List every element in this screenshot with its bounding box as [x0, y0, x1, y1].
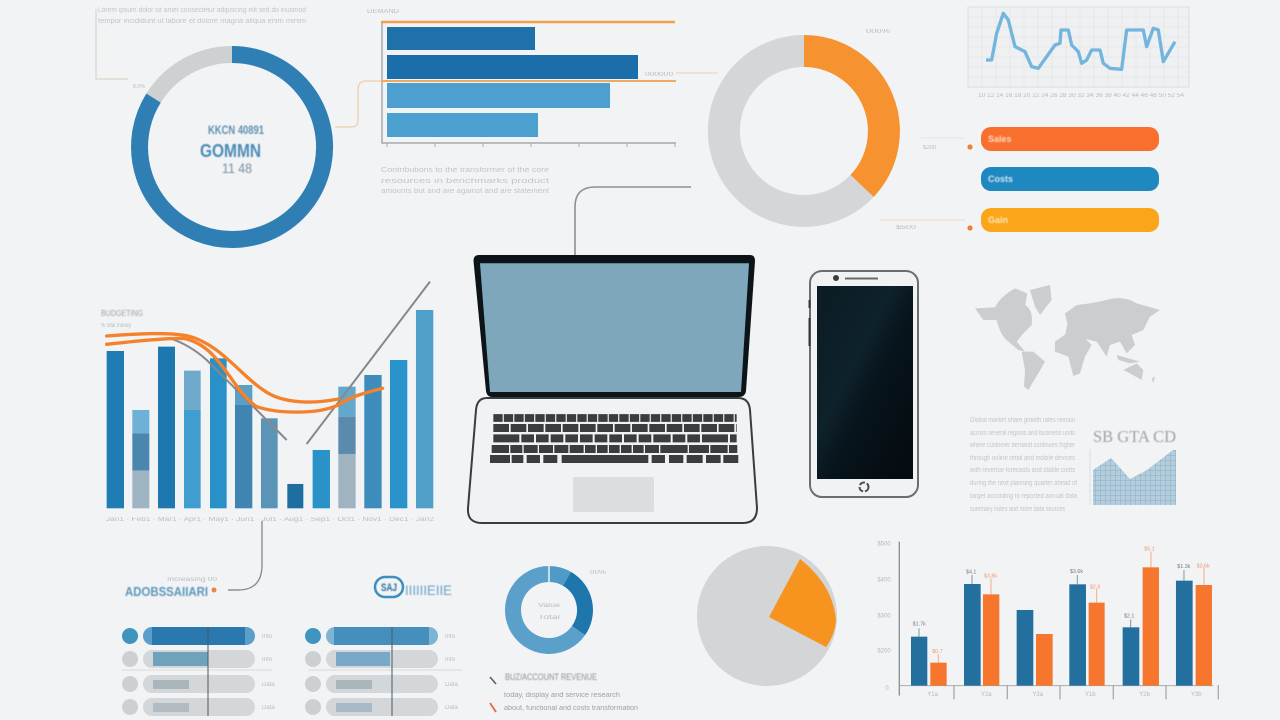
blue bars — [911, 581, 1193, 686]
value labels: $1.3k — [1177, 564, 1191, 570]
row 1: Info — [262, 634, 273, 640]
row 3: Data — [445, 682, 458, 688]
chart: orange and grey donut — [724, 29, 891, 211]
legend leaders: $500 — [896, 225, 917, 231]
pill: orange: Sales — [988, 134, 1012, 144]
legend leaders — [880, 138, 973, 231]
pill: amber: Gain — [988, 215, 1008, 225]
chart heading: % total money — [101, 323, 131, 329]
legend: coloured pills — [880, 127, 1159, 232]
phone camera and speaker — [833, 275, 878, 281]
axis labels: $300 — [877, 613, 891, 619]
axis labels: $400 — [877, 578, 891, 584]
axis — [897, 542, 901, 696]
panel: top-left note with bracket — [96, 7, 306, 79]
row 4 — [122, 698, 275, 716]
keyboard — [490, 418, 738, 459]
device: smartphone — [808, 271, 918, 497]
donut centre label — [200, 123, 264, 176]
chart: grouped bars bottom right: $3.6k — [1197, 563, 1210, 569]
row 2 — [305, 650, 456, 668]
chart: orange and grey donut: 000% — [866, 29, 891, 35]
row 3 — [305, 675, 458, 693]
row 1: Info — [445, 634, 456, 640]
orange bars — [930, 567, 1212, 686]
chart: grouped bars bottom right — [877, 542, 1218, 699]
text block: small donut notes: today, display and service research — [504, 692, 620, 699]
axis labels: 0 — [885, 686, 889, 692]
panel: top-left note with bracket: Lorem ipsum dolor sit amet consectetur adipiscing elit sed do eiusmod — [98, 7, 306, 14]
chart: horizontal bar chart: DEMAND — [367, 9, 400, 15]
text block: bar chart caption — [381, 167, 549, 195]
chart: small blue donut: Total — [538, 615, 560, 621]
chart: top-right line chart on grid — [968, 7, 1189, 99]
pie orange slice — [769, 559, 836, 647]
connector: donut to bar chart — [335, 81, 382, 127]
text block: small donut notes: BUZ/ACCOUNT REVENUE — [505, 672, 597, 682]
x axis labels: Jan1 · Feb1 · Mar1 · Apr1 · May1 · Jun1 · Jul1 · Aug1 · Sep1 · Oct1 · Nov1 · Dec1 · Jan2 — [106, 517, 435, 523]
row 2: Info — [262, 657, 273, 663]
row 3: Data — [262, 682, 275, 688]
text block: paragraph below map: with revenue forecasts and stable costs — [969, 467, 1075, 474]
donut centre label: KKCN 40891 — [208, 123, 264, 137]
connector: bar chart to list heading — [228, 521, 262, 590]
value labels: $1.7k — [913, 622, 926, 628]
panel: top-left note with bracket: tempor incididunt ut labore et dolore magna aliqua enim minim — [98, 18, 306, 25]
row 4: Data — [262, 705, 275, 711]
text block: paragraph below map: during the next planning quarter ahead of — [970, 480, 1077, 487]
device: laptop — [468, 255, 757, 523]
chart: large blue donut — [133, 54, 325, 239]
row 2 — [122, 650, 273, 668]
axis labels: Y2b — [1139, 692, 1151, 698]
chart: small area chart: SB GTA CD — [1093, 427, 1176, 446]
panel: left progress list — [122, 627, 275, 716]
chart: small blue donut: 00% — [590, 570, 607, 576]
list heading: right — [375, 577, 452, 598]
row 2: Info — [445, 657, 456, 663]
axis labels: Y2a — [981, 692, 992, 698]
value labels: $2.1 — [1124, 613, 1134, 619]
chart: small blue donut — [513, 566, 607, 646]
axis labels: Y3b — [1191, 692, 1202, 698]
text block: paragraph below map: through online retail and mobile devices — [970, 455, 1075, 462]
row 1 — [122, 627, 273, 645]
chart: left bar chart with trend curves — [101, 282, 435, 523]
chart: pie chart — [697, 546, 837, 686]
text block: paragraph below map: where customer demand continues higher — [969, 442, 1076, 449]
home button — [860, 482, 868, 492]
bar 4 — [387, 113, 538, 137]
text block: small donut notes — [490, 672, 638, 712]
list heading: left — [125, 577, 218, 599]
chart heading: BUDGETING — [101, 309, 143, 318]
text block: paragraph below map: across several regions and business units — [970, 430, 1075, 437]
chart: large blue donut: 8.0% — [133, 84, 146, 90]
chart: grouped bars bottom right: $3.8k — [984, 573, 997, 579]
axis labels — [877, 542, 1202, 698]
bar 2 — [387, 55, 638, 79]
row 1 — [305, 627, 456, 645]
text block: bar chart caption: amounts but and are against and are statement — [381, 188, 549, 195]
graphic: world map — [975, 285, 1160, 390]
list heading: left: ADOBSSAIIARI — [125, 584, 208, 599]
laptop screen — [474, 255, 755, 397]
value labels: $4.1 — [966, 569, 976, 575]
pill: blue: Costs — [988, 174, 1013, 184]
trackpad — [573, 477, 654, 512]
chart: top-right line chart on grid: 10 12 14 16 18 20 22 24 26 28 30 32 34 36 38 40 42 44 46 48 50 52 54 — [978, 93, 1185, 99]
text block: small donut notes: about, functional and costs transformation — [504, 705, 638, 712]
donut centre label: GOMMN — [200, 141, 261, 161]
row 3 — [122, 675, 275, 693]
axis labels: Y3a — [1032, 692, 1044, 698]
chart: grouped bars bottom right: $2.9 — [1090, 585, 1100, 591]
axis labels: Y1a — [927, 692, 939, 698]
orange trend curves — [107, 334, 383, 412]
text block: paragraph below map: summary notes and more data sources — [970, 506, 1065, 513]
axis labels: $200 — [877, 649, 891, 655]
axis labels: Y1b — [1085, 692, 1096, 698]
bar 1 — [387, 27, 535, 50]
value labels: $3.6k — [1070, 569, 1083, 575]
row 4: Data — [445, 705, 458, 711]
chart: grouped bars bottom right: $0.7 — [932, 649, 943, 655]
text block: paragraph below map: Global market share growth rates remain — [970, 417, 1075, 424]
phone screen — [817, 286, 913, 479]
list heading: right: IIIIIIEIIE — [405, 582, 452, 598]
pill: orange — [981, 127, 1159, 151]
pill: amber — [981, 208, 1159, 232]
chart heading — [101, 309, 143, 329]
legend leaders: $200 — [923, 145, 937, 151]
list heading: left: Increasing 00 — [167, 577, 218, 583]
connector: laptop to top panel — [575, 187, 691, 255]
grey trend lines — [170, 282, 430, 444]
chart: small area chart — [1090, 427, 1176, 505]
axis labels: $500 — [877, 542, 891, 548]
laptop base — [468, 398, 757, 523]
bar 3 — [387, 83, 610, 108]
value stems — [919, 570, 1184, 637]
chart: small blue donut: Value — [538, 603, 561, 609]
chart: horizontal bar chart: 000000 — [645, 72, 674, 78]
text block: paragraph below map — [969, 417, 1077, 513]
chart: horizontal bar chart — [367, 9, 718, 147]
pill: blue — [981, 167, 1159, 191]
row 4 — [305, 698, 458, 716]
value labels — [913, 564, 1191, 628]
text block: bar chart caption: Contributions to the transformer of the core — [381, 167, 549, 174]
list heading: right: SAJ — [381, 582, 397, 594]
donut centre label: 11 48 — [222, 160, 252, 176]
text block: paragraph below map: target according to reported annual data — [970, 493, 1077, 500]
panel: right progress list — [305, 627, 462, 716]
chart: grouped bars bottom right: $5.1 — [1144, 547, 1155, 553]
bars — [107, 310, 433, 508]
text block: bar chart caption: resources in benchmarks product — [381, 178, 549, 185]
